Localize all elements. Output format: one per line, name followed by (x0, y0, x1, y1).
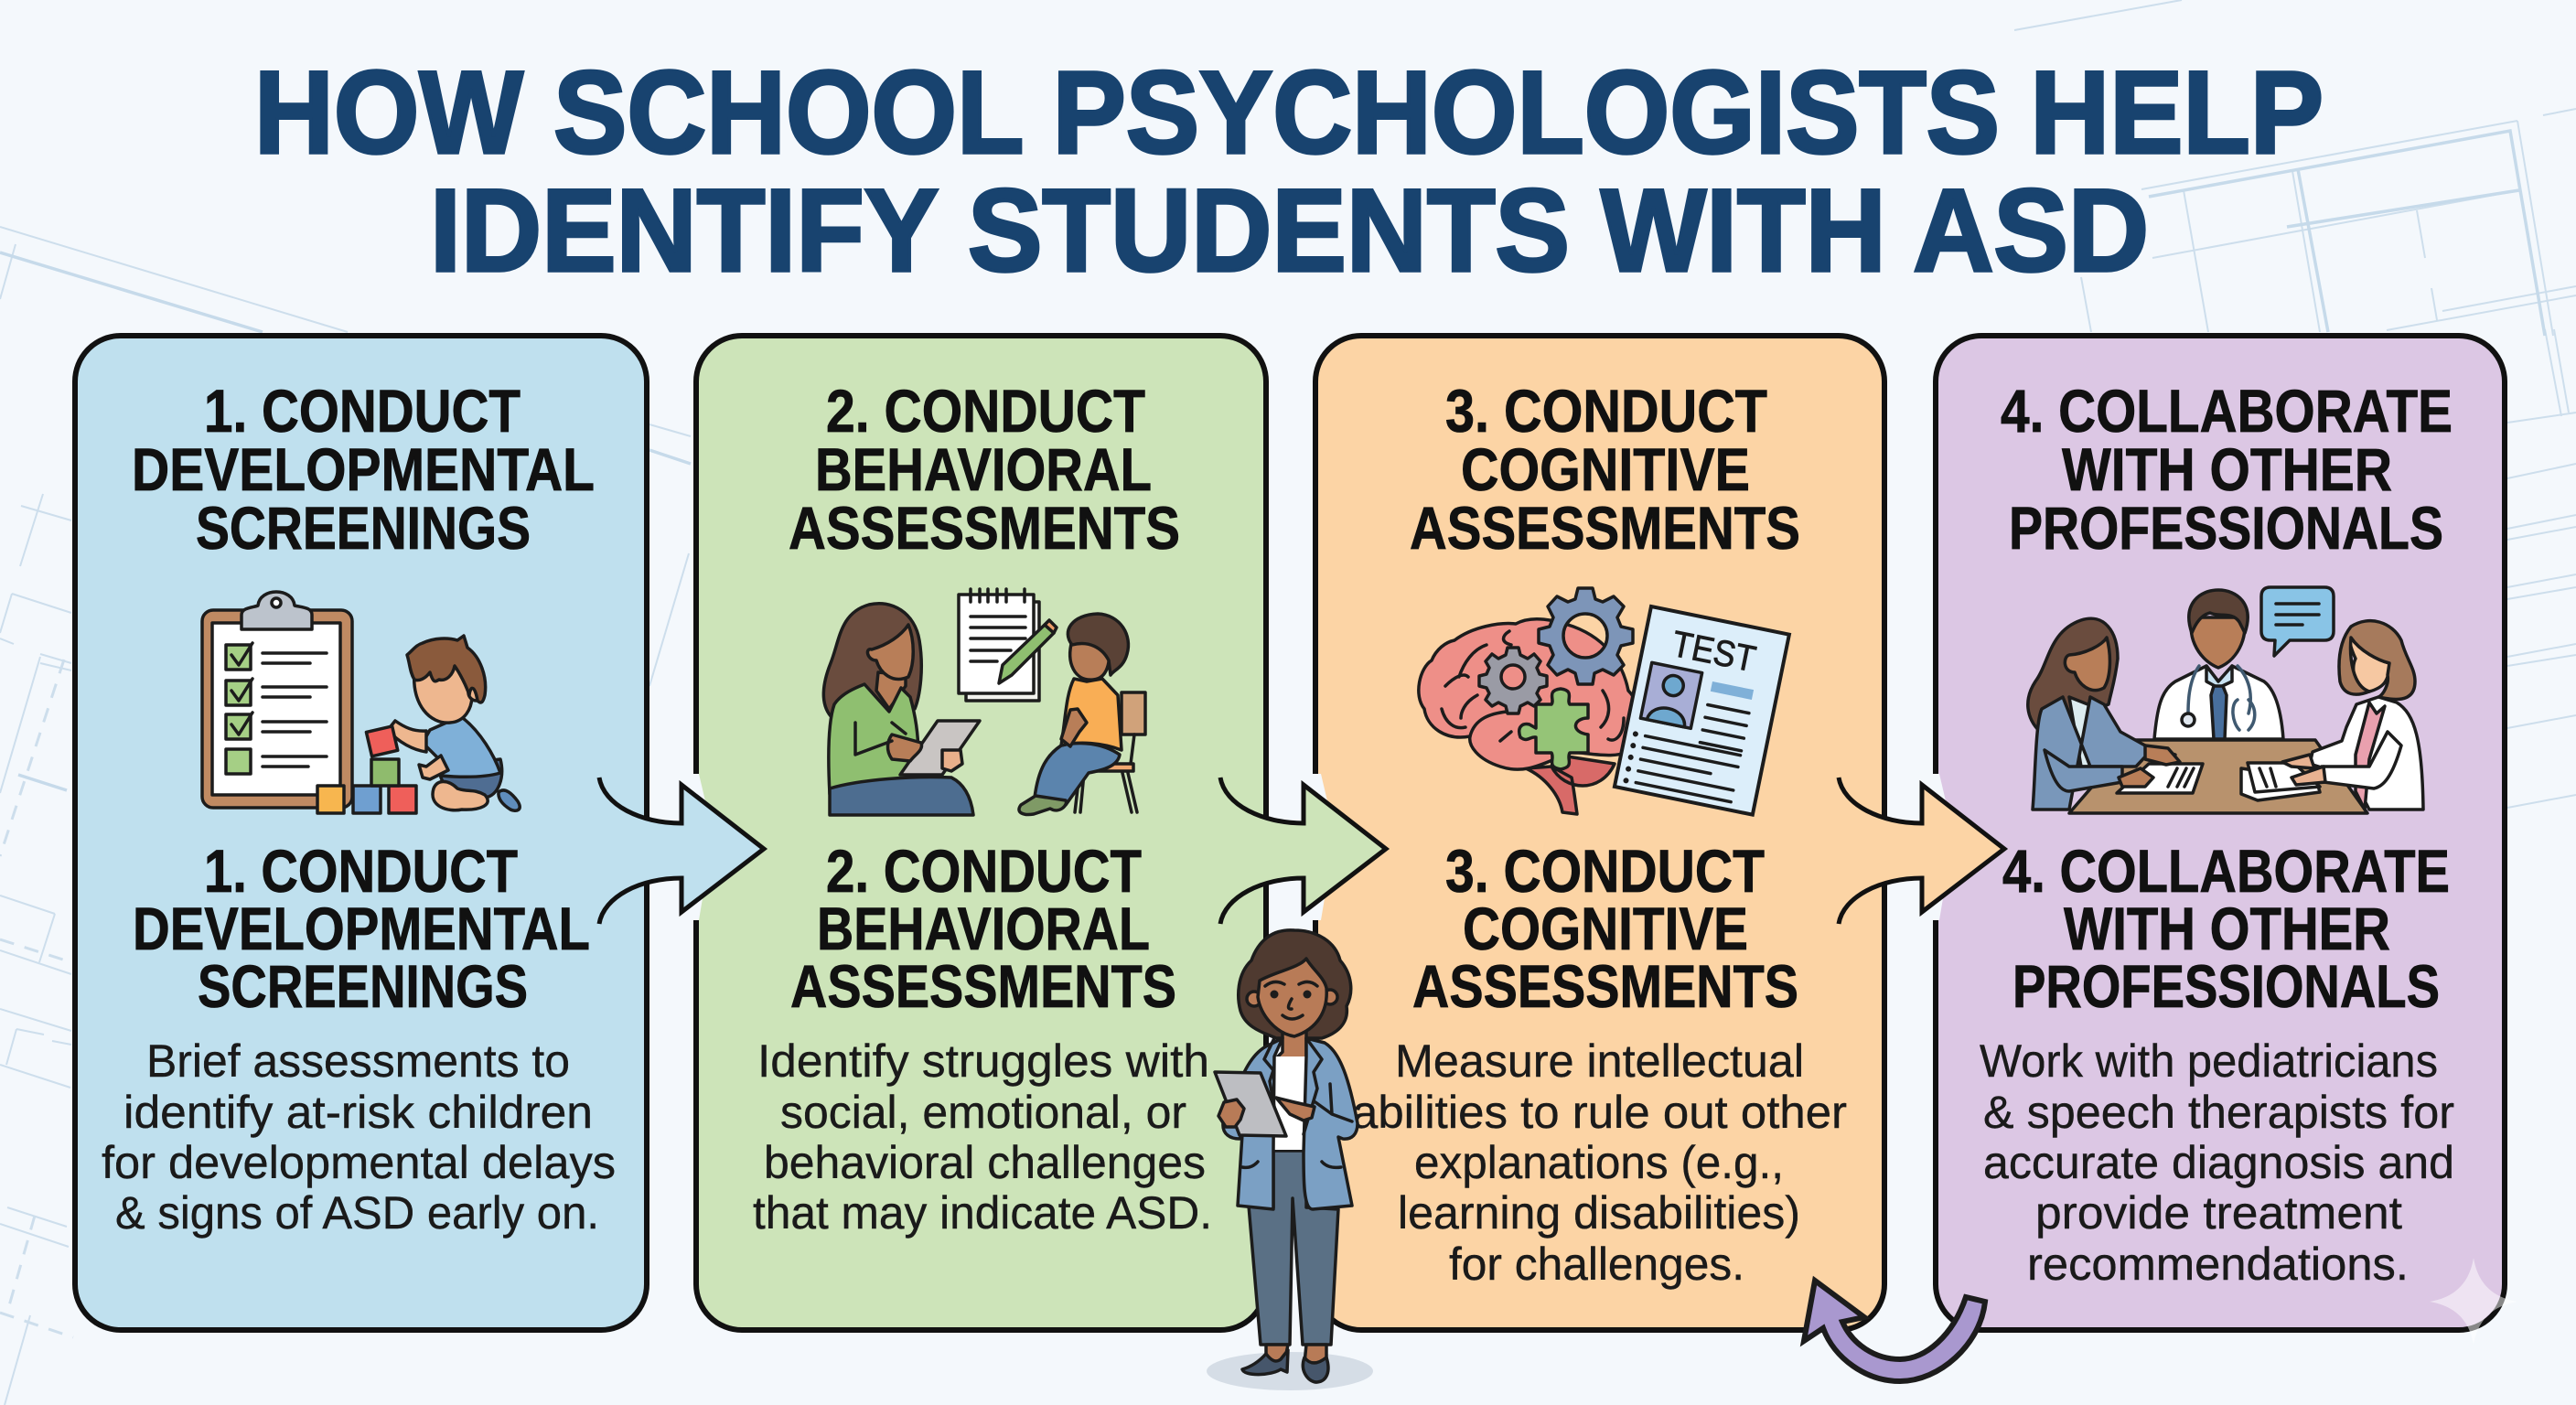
text: panel 1 description: Brief assessments to (146, 1035, 570, 1087)
icon: three professionals meeting at a table (2028, 587, 2423, 813)
text: panel 1 description (102, 1035, 616, 1239)
text: panel 3 description: abilities to rule out other (1352, 1087, 1847, 1138)
heading: panel 2 top (789, 377, 1180, 562)
heading: panel 3 lower (1412, 837, 1798, 1020)
text: panel 2 description: behavioral challenges (764, 1137, 1206, 1188)
text: panel 3 description: for challenges. (1449, 1239, 1744, 1290)
icon: psychologist observing a seated child with notepad (823, 589, 1145, 815)
title: HOW SCHOOL PSYCHOLOGISTS HELP (254, 48, 2324, 178)
heading: panel 3 top: COGNITIVE (1461, 435, 1750, 503)
arrow: curved feedback arrow from step 4 to step 3 (1804, 1281, 1985, 1381)
text: panel 1 description: for developmental delays (102, 1137, 616, 1188)
heading: panel 2 top: 2. CONDUCT (826, 377, 1145, 445)
heading: panel 2 top: ASSESSMENTS (789, 494, 1180, 562)
text: panel 4 description (1980, 1035, 2454, 1290)
heading: panel 1 lower (133, 837, 590, 1020)
heading: panel 3 lower: COGNITIVE (1463, 895, 1748, 962)
heading: panel 1 top: DEVELOPMENTAL (132, 435, 595, 503)
icon: clipboard checklist and child with blocks (202, 592, 520, 813)
heading: panel 4 lower: 4. COLLABORATE (2002, 837, 2450, 905)
heading: panel 3 top: 3. CONDUCT (1445, 377, 1767, 445)
heading: panel 2 lower: ASSESSMENTS (790, 952, 1176, 1020)
text: panel 4 description: recommendations. (2027, 1239, 2409, 1290)
panel: collaborate with other professionals (1936, 336, 2505, 1330)
text: panel 2 description (753, 1035, 1212, 1239)
panel: behavioral assessments (696, 336, 1266, 1330)
heading: panel 4 top (2001, 377, 2453, 562)
heading: panel 1 top (132, 377, 595, 562)
text: panel 4 description: accurate diagnosis and (1983, 1137, 2454, 1188)
text: panel 1 description: & signs of ASD early on. (115, 1187, 599, 1239)
title: IDENTIFY STUDENTS WITH ASD (430, 166, 2149, 296)
heading: panel 4 lower: PROFESSIONALS (2012, 952, 2440, 1020)
illustration: school psychologist with tablet (1207, 930, 1373, 1390)
heading: panel 4 top: PROFESSIONALS (2009, 494, 2443, 562)
heading: panel 3 top (1410, 377, 1800, 562)
heading: panel 1 top: SCREENINGS (196, 494, 531, 562)
text: panel 4 description: & speech therapists for (1983, 1087, 2454, 1138)
heading: panel 2 lower (790, 837, 1176, 1020)
heading: panel 1 lower: DEVELOPMENTAL (133, 895, 590, 962)
text: panel 4 description: Work with pediatricians (1980, 1035, 2438, 1087)
heading: panel 3 lower: ASSESSMENTS (1412, 952, 1798, 1020)
arrow: step 3 to step 4 (1839, 778, 2004, 924)
heading: panel 2 lower: 2. CONDUCT (826, 837, 1142, 905)
text: panel 3 description: Measure intellectual (1395, 1035, 1804, 1087)
heading: panel 3 lower: 3. CONDUCT (1445, 837, 1765, 905)
icon: sparkle watermark (2430, 1258, 2517, 1345)
text: panel 2 description: that may indicate ASD. (753, 1187, 1212, 1239)
heading: panel 4 top: 4. COLLABORATE (2001, 377, 2453, 445)
arrow: step 2 to step 3 (1220, 778, 1386, 924)
heading: panel 3 top: ASSESSMENTS (1410, 494, 1800, 562)
panel: developmental screenings (75, 336, 647, 1330)
text: panel 3 description: learning disabilities) (1398, 1187, 1800, 1239)
title (254, 48, 2324, 296)
text: panel 2 description: social, emotional, or (780, 1087, 1186, 1138)
text: panel 2 description: Identify struggles with (757, 1035, 1209, 1087)
heading: panel 4 lower: WITH OTHER (2064, 895, 2390, 962)
icon: brain with gears and puzzle piece beside test sheet (1419, 588, 1789, 815)
heading: panel 4 top: WITH OTHER (2062, 435, 2392, 503)
arrow: step 1 to step 2 (599, 778, 764, 924)
heading: panel 2 top: BEHAVIORAL (815, 435, 1152, 503)
panel: cognitive assessments (1315, 336, 1884, 1330)
heading: panel 1 top: 1. CONDUCT (204, 377, 521, 445)
heading: panel 1 lower: SCREENINGS (198, 952, 528, 1020)
heading: panel 1 lower: 1. CONDUCT (204, 837, 518, 905)
heading: panel 4 lower (2002, 837, 2450, 1020)
text: panel 3 description (1352, 1035, 1847, 1290)
heading: panel 2 lower: BEHAVIORAL (817, 895, 1150, 962)
text: panel 1 description: identify at-risk children (123, 1087, 593, 1138)
text: panel 3 description: explanations (e.g., (1414, 1137, 1784, 1188)
icon: brain with gears and puzzle piece beside test sheet: TEST (1669, 624, 1759, 680)
text: panel 4 description: provide treatment (2035, 1187, 2402, 1239)
